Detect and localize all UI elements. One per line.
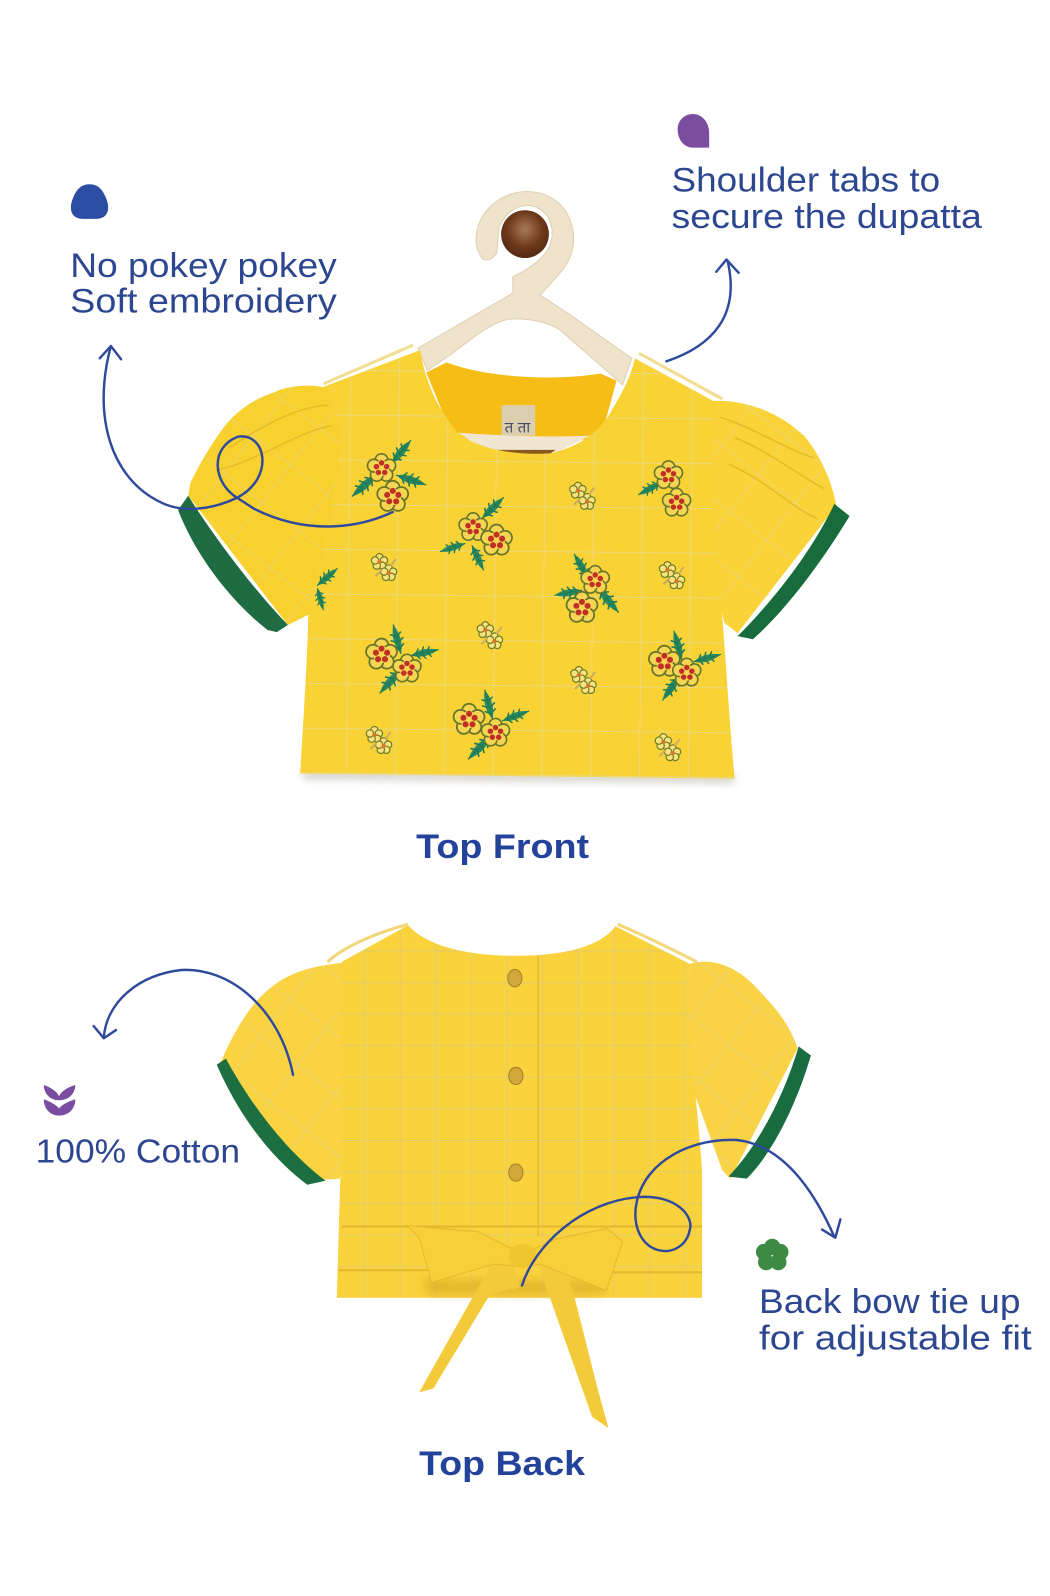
text: cotton: 100% Cotton	[36, 1133, 240, 1170]
front top body and sleeves	[178, 345, 850, 779]
text: no pokey pokey	[70, 247, 338, 320]
shoulder tab right	[639, 353, 722, 399]
right cuff	[728, 1046, 811, 1179]
arrow: bow tie callout	[522, 1140, 840, 1286]
centre placket	[537, 957, 539, 1237]
embroidery cluster 1	[348, 437, 428, 511]
back check pattern	[337, 925, 702, 1298]
embroidery cluster 6	[649, 630, 722, 703]
left cuff	[178, 496, 288, 632]
text: shoulder tabs: secure the dupatta	[672, 198, 983, 236]
hanger lower bar	[458, 433, 590, 453]
small embroidery motifs	[313, 482, 685, 761]
bow tails	[419, 1257, 608, 1428]
back garment photo group	[217, 924, 811, 1428]
text: no pokey pokey: Soft embroidery	[70, 282, 338, 320]
button 2	[509, 1067, 523, 1085]
heading: top back: Top Back	[419, 1445, 586, 1483]
text: back bow	[759, 1283, 1032, 1358]
arrow: shoulder tabs callout	[666, 260, 739, 361]
icon: green clover	[756, 1239, 789, 1270]
garment label tag: त ता	[505, 420, 531, 437]
embroidery cluster 4	[554, 551, 623, 622]
arrow: cotton callout	[94, 970, 293, 1075]
text: shoulder tabs: Shoulder tabs to	[672, 161, 940, 199]
text: no pokey pokey: No pokey pokey	[70, 247, 338, 285]
bow shadow	[422, 1278, 606, 1295]
shoulder straps	[328, 924, 697, 962]
garment drop shadow	[303, 770, 735, 784]
embroidery cluster 7	[454, 689, 531, 763]
heading: top front: Top Front	[416, 828, 590, 866]
icon: purple drop	[678, 114, 709, 148]
dark neck gap	[490, 450, 556, 457]
embroidery cluster 2	[439, 493, 512, 572]
right sleeve	[682, 962, 798, 1179]
front garment photo group	[178, 191, 850, 784]
text: shoulder tabs	[672, 161, 983, 236]
garment label tag	[502, 405, 535, 437]
button 1	[508, 970, 522, 987]
bodice	[300, 350, 735, 779]
icon: purple tulips	[44, 1085, 75, 1116]
text: back bow: Back bow tie up	[759, 1283, 1020, 1321]
shoulder tab left	[324, 345, 413, 384]
neck lining	[426, 362, 617, 440]
left cuff	[217, 1059, 326, 1185]
left sleeve	[188, 386, 351, 625]
embroidery cluster 3	[636, 461, 691, 516]
icon: blue blob	[71, 184, 108, 219]
sleeve pleats	[216, 405, 824, 519]
bow	[407, 1226, 623, 1291]
waist band line	[338, 1227, 702, 1272]
hanger knob	[501, 210, 549, 258]
right cuff	[738, 504, 850, 639]
arrow: no pokey callout	[100, 346, 393, 526]
right sleeve	[688, 401, 836, 633]
left sleeve	[220, 963, 356, 1181]
back bodice	[337, 925, 702, 1298]
button 3	[509, 1164, 523, 1181]
front check pattern	[300, 350, 735, 779]
hanger	[418, 191, 632, 385]
embroidery cluster 5	[366, 623, 439, 697]
text: back bow: for adjustable fit	[759, 1320, 1032, 1358]
